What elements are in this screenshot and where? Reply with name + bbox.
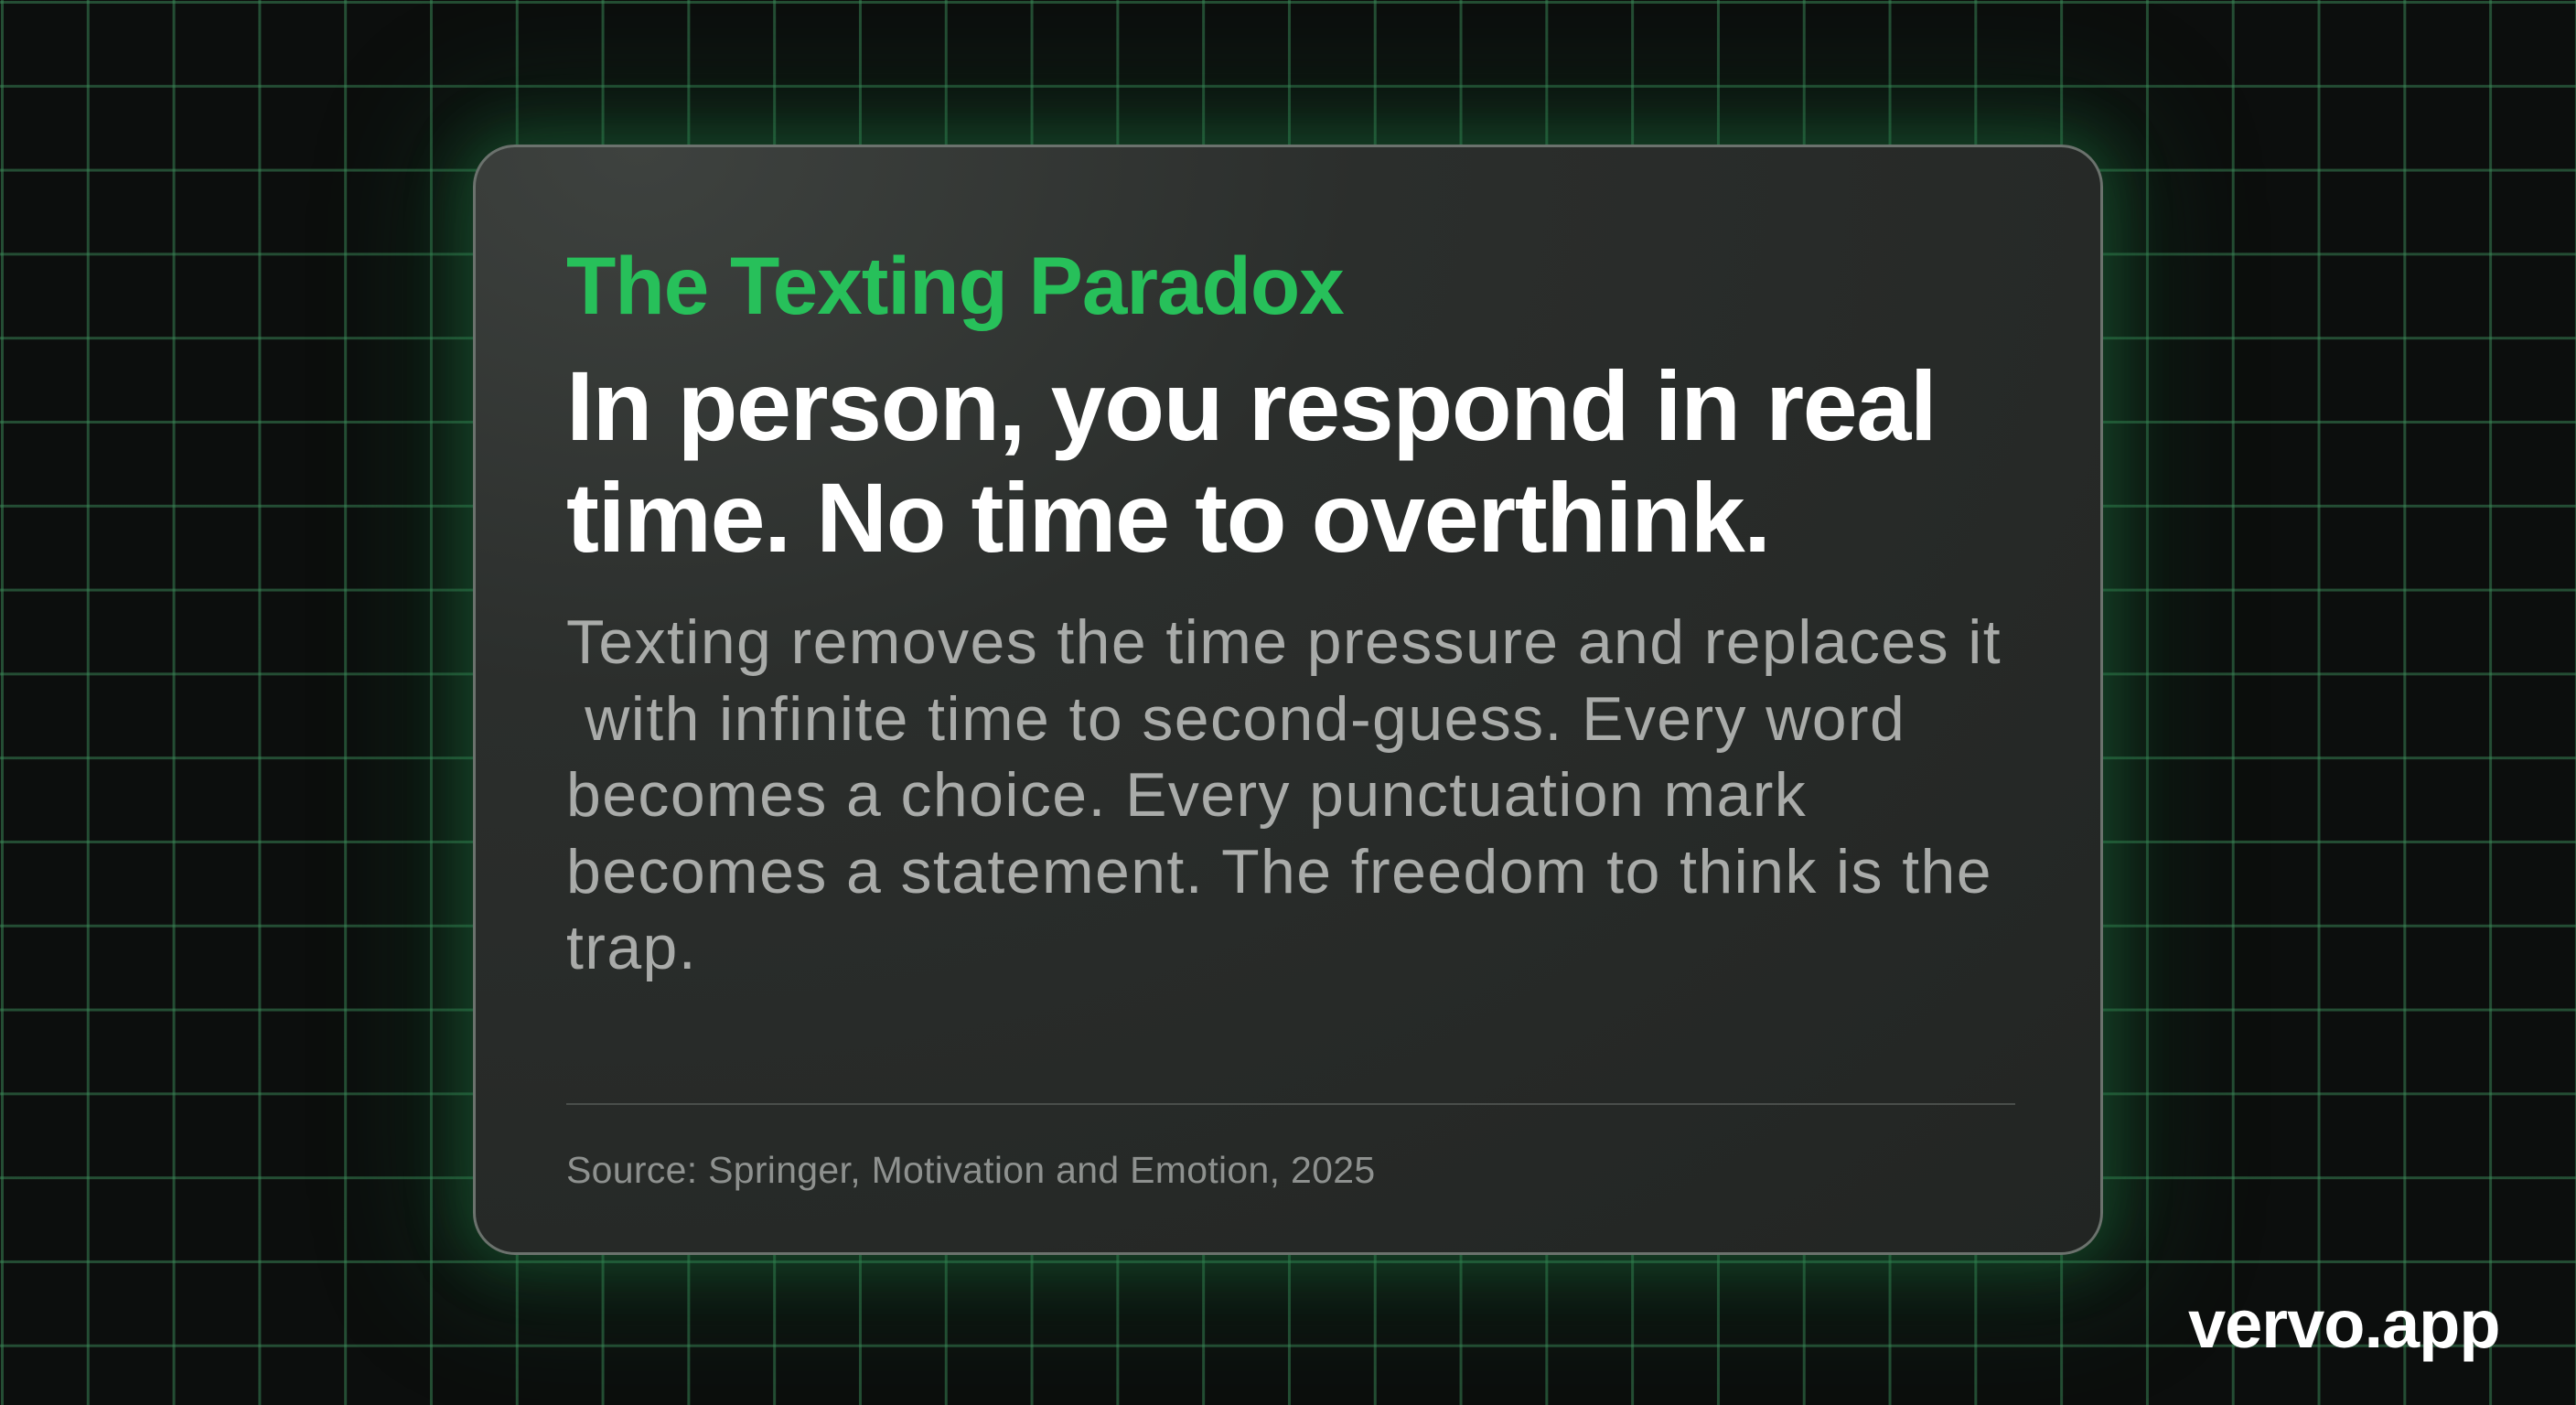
brand logo text: vervo.app: [2188, 1286, 2500, 1362]
headline: [566, 350, 1936, 573]
body text: becomes a statement. The freedom to think is the: [566, 836, 1992, 906]
body text: [566, 607, 2002, 982]
body text: with infinite time to second-guess. Every word: [585, 684, 1905, 754]
panel: card: [473, 145, 2103, 1255]
source: Source: Springer, Motivation and Emotion, 2025: [566, 1149, 1375, 1191]
headline: In person, you respond in real: [566, 350, 1936, 461]
body text: trap.: [566, 913, 697, 982]
body text: becomes a choice. Every punctuation mark: [566, 760, 1807, 830]
title: The Texting Paradox: [566, 240, 1344, 331]
body text: Texting removes the time pressure and replaces it: [566, 607, 2002, 677]
headline: time. No time to overthink.: [566, 462, 1770, 573]
